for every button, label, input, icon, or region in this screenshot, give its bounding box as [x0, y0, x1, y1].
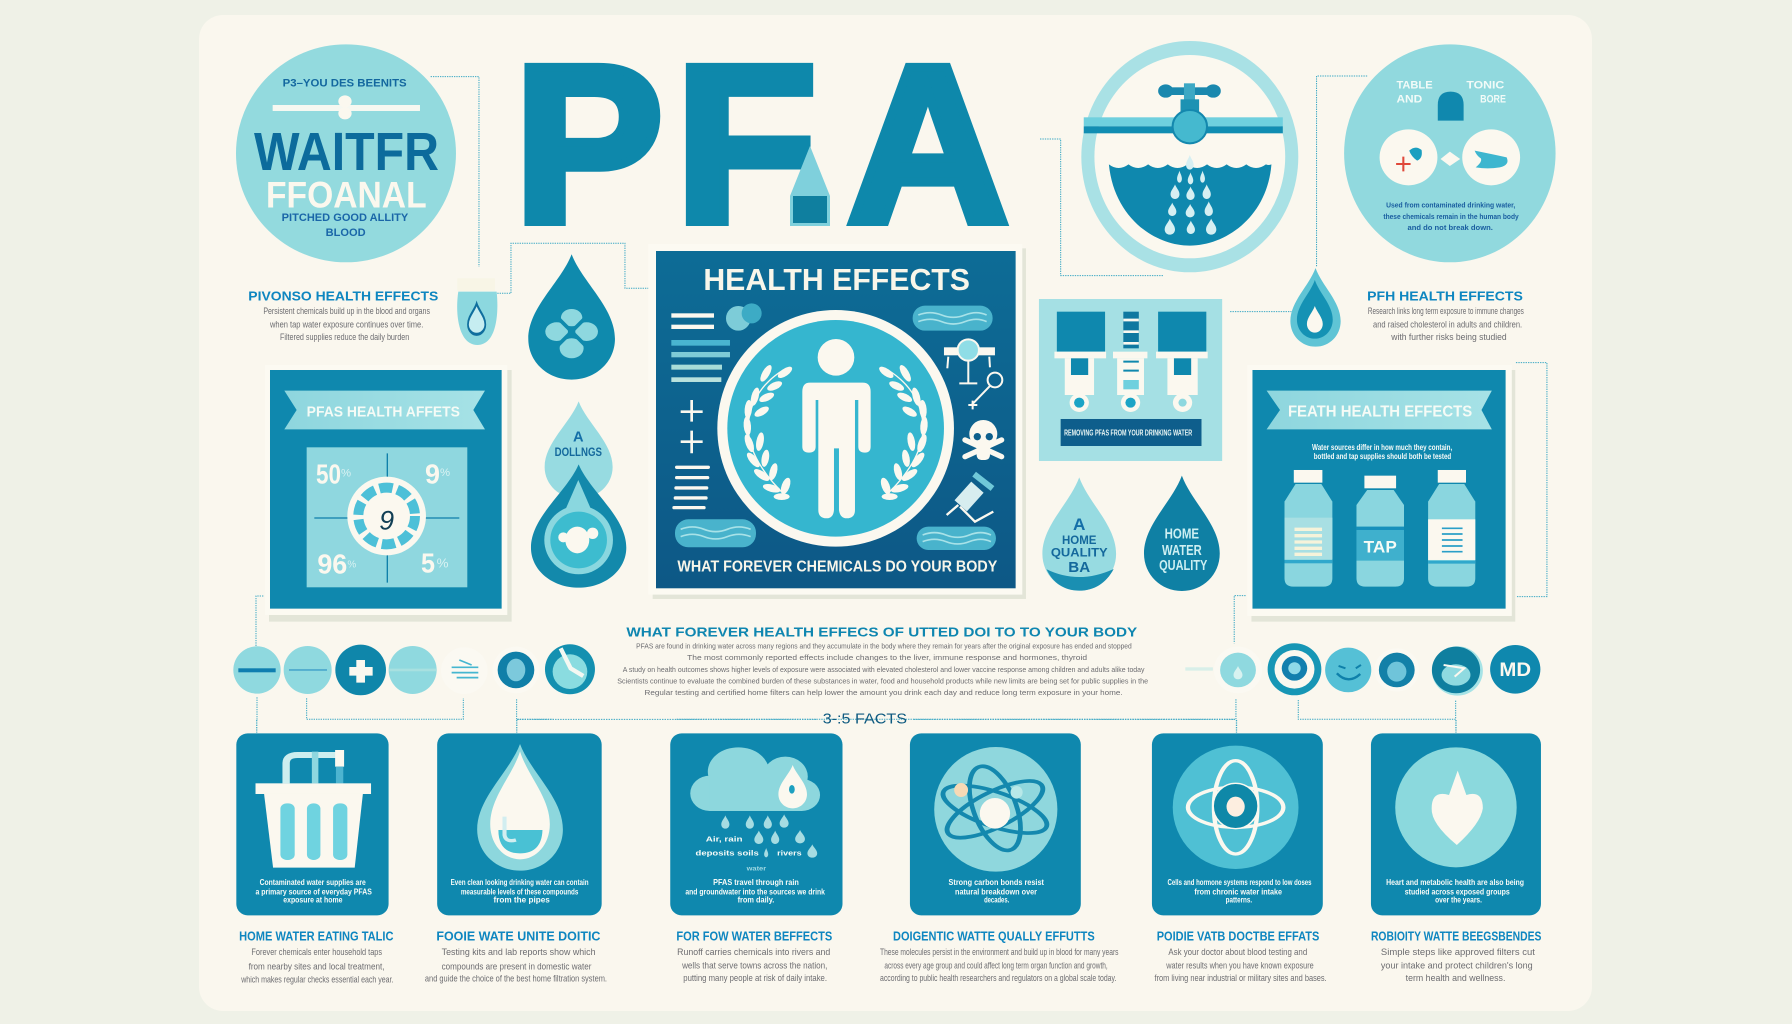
fact card 4: atom: natural breakdown over — [955, 887, 1037, 896]
icon: small title drop — [790, 146, 830, 226]
fact card 6: heart: studied across exposed groups — [1405, 887, 1510, 896]
fact card 4: atom — [910, 733, 1081, 915]
chart: quadrant dial: 9 — [425, 458, 440, 489]
panel: left dial — [265, 365, 512, 622]
icon: skull and crossbones — [965, 420, 1002, 460]
text block: left health effects: when tap water exposure continues over time. — [269, 319, 423, 329]
drop: home water quality light: BA — [1068, 560, 1090, 576]
chart: quadrant dial: 5 — [421, 548, 435, 579]
caption card 6 — [1371, 930, 1542, 984]
icon: right small drop — [1290, 268, 1341, 347]
fact card 5: cell: Cells and hormone systems respond to low doses — [1168, 878, 1312, 887]
chart: quadrant dial: % — [341, 468, 351, 480]
main card — [199, 15, 1592, 1011]
intro text: bottled and tap supplies should both be tested — [1314, 452, 1451, 461]
icon: cell rings — [1173, 746, 1299, 869]
caption card 5: POIDIE VATB DOCTBE EFFATS — [1157, 930, 1319, 944]
caption card 6: term health and wellness. — [1406, 974, 1505, 984]
fact card 1: basket faucet: Contaminated water supplies are — [260, 878, 366, 887]
caption card 2: compounds are present in domestic water — [442, 962, 592, 972]
drop: home water quality dark: HOME — [1165, 527, 1199, 542]
drop: water lens dark — [531, 464, 626, 588]
fact card 3: rain cloud: and groundwater into the sources we drink — [685, 887, 825, 896]
ribbon heading: PFAS HEALTH AFFETS — [307, 405, 460, 421]
badge: water circle: WAITFR — [254, 123, 439, 182]
text block: center body description: PFAS are found in drinking water across many regions and they accumulate in the body where they remain for years after the original exposure has ended and stopped — [636, 642, 1132, 650]
text block: center body description — [617, 624, 1149, 697]
panel: central health effects — [648, 244, 1026, 599]
icon: right laurel — [877, 363, 929, 500]
icon: water drop with pipe — [477, 744, 563, 871]
text block: center body description: The most commonly reported effects include changes to the liver, immune response and hormones, thyroid — [687, 653, 1087, 662]
caption card 3: putting many people at risk of daily intake. — [683, 974, 827, 984]
fact card 4: atom: decades. — [984, 896, 1009, 904]
badge: right circle: BORE — [1480, 94, 1506, 106]
fact card 3: rain cloud: PFAS travel through rain — [713, 878, 799, 887]
connector ticks right cards — [1237, 720, 1456, 733]
fact card 2: drop — [437, 733, 602, 915]
ribbon heading — [1267, 391, 1492, 429]
badge: right circle: and do not break down. — [1407, 223, 1493, 232]
connector lines top left — [431, 77, 648, 293]
text block: left health effects: Filtered supplies reduce the daily burden — [280, 332, 409, 342]
caption card 3: wells that serve towns across the nation, — [681, 961, 827, 971]
icon: cloud and rain: deposits soils — [696, 849, 759, 857]
text block: left health effects: PIVONSO HEALTH EFFECTS — [248, 290, 438, 304]
drop: home water quality dark — [1144, 476, 1220, 591]
text block: right health effects: and raised cholesterol in adults and children. — [1373, 320, 1522, 330]
icon: syringe — [947, 472, 994, 522]
fact card 2: drop: Even clean looking drinking water can contain — [451, 878, 589, 887]
drop: home water quality light: A — [1073, 515, 1085, 534]
caption card 2: FOOIE WATE UNITE DOITIC — [436, 930, 600, 944]
fact card 2: drop: measurable levels of these compounds — [461, 887, 578, 896]
bottle 2: tap: TAP — [1364, 538, 1397, 557]
drop: home water quality light: QUALITY — [1051, 546, 1108, 560]
drop: dollars light: A — [573, 430, 584, 446]
caption card 6: your intake and protect children's long — [1381, 961, 1533, 971]
text block: left health effects: Persistent chemicals build up in the blood and organs — [263, 306, 430, 316]
caption card 1 — [239, 930, 393, 985]
caption card 5 — [1155, 930, 1327, 984]
heading: health effects: HEALTH EFFECTS — [703, 263, 970, 297]
fact card 6: heart: over the years. — [1435, 896, 1482, 904]
badge: person in laurel circle — [717, 310, 954, 547]
fact card 1: basket faucet — [236, 733, 389, 915]
fact card 6: heart: Heart and metabolic health are also being — [1386, 878, 1524, 887]
badge: right circle: these chemicals remain in the human body — [1383, 212, 1519, 221]
title: PFA: A — [847, 20, 1009, 270]
bottle 3 — [1428, 470, 1475, 587]
connector ticks left cards — [257, 720, 517, 733]
badge: right circle: TABLE — [1396, 79, 1433, 91]
caption card 3 — [676, 930, 832, 984]
chart: quadrant dial: 9 — [379, 505, 394, 535]
chart: quadrant dial: 50 — [316, 458, 341, 489]
icon: left laurel — [743, 363, 794, 500]
text block: center body description: WHAT FOREVER HEALTH EFFECS OF UTTED DOI TO TO YOUR BODY — [626, 624, 1138, 640]
caption card 5: Ask your doctor about blood testing and — [1168, 948, 1307, 958]
badge: water circle: BLOOD — [326, 227, 366, 239]
chart: quadrant dial — [307, 447, 467, 587]
title: PFA — [514, 20, 1009, 270]
icon: heart in circle — [1395, 747, 1517, 867]
connector lines left row — [256, 596, 553, 720]
badge: right circle: AND — [1396, 94, 1422, 106]
chart: quadrant dial: % — [440, 467, 450, 479]
water bowl — [1109, 164, 1271, 246]
icon: atom — [934, 747, 1057, 872]
faucet — [1158, 83, 1221, 143]
text block: right health effects — [1367, 289, 1524, 342]
chart: quadrant dial: % — [437, 555, 449, 570]
badge: water circle — [236, 44, 456, 262]
badge: right circle: Used from contaminated drinking water, — [1386, 201, 1515, 210]
caption card 5: water results when you have known exposure — [1166, 961, 1314, 971]
panel: filter cartridges: REMOVING PFAS FROM YOUR DRINKING WATER — [1064, 428, 1192, 437]
fact card 6: heart — [1371, 733, 1541, 915]
caption card 1: from nearby sites and local treatment, — [249, 962, 385, 972]
bottle 2: tap — [1356, 476, 1404, 587]
caption card 3: FOR FOW WATER BEFFECTS — [676, 930, 832, 944]
caption card 4 — [880, 930, 1119, 984]
icon: key — [968, 373, 1002, 409]
fact card 2: drop: from the pipes — [493, 895, 550, 904]
fact card 1: basket faucet: a primary source of everyday PFAS — [256, 887, 372, 896]
icon row: right circles: MD — [1499, 659, 1531, 681]
bottle 1 — [1284, 470, 1332, 587]
icon: cloud and rain: water — [746, 864, 766, 872]
title: PFA: F — [675, 20, 817, 270]
heading: 3-5 facts with rules: 3-:5 FACTS — [823, 711, 907, 727]
chart: quadrant dial: % — [347, 559, 356, 570]
caption card 3: Runoff carries chemicals into rivers and — [677, 948, 830, 958]
fact card 5: cell — [1152, 733, 1323, 915]
icon: cloud and rain — [690, 747, 820, 872]
connector lines top right — [1040, 76, 1367, 312]
caption card 2 — [425, 930, 607, 984]
text block: left health effects — [248, 290, 438, 342]
fact card 4: atom: Strong carbon bonds resist — [949, 878, 1044, 887]
connector lines right panel — [676, 363, 1547, 719]
icon: wave blobs — [675, 306, 996, 550]
text block: right health effects: PFH HEALTH EFFECTS — [1367, 289, 1523, 304]
text block: right health effects: Research links long term exposure to immune changes — [1368, 306, 1524, 316]
pipe — [1084, 117, 1283, 133]
fact card 3: rain cloud — [670, 733, 843, 915]
text block: right health effects: with further risks being studied — [1390, 332, 1507, 342]
panel: filter cartridges — [1039, 299, 1222, 461]
badge: water circle: PITCHED GOOD ALLITY — [282, 212, 409, 224]
fact card 5: cell: patterns. — [1226, 896, 1252, 904]
filter label — [1061, 419, 1201, 446]
drop: dollars light: DOLLNGS — [555, 445, 602, 459]
panel: right bottles — [1247, 365, 1515, 622]
title: PFA: P — [514, 20, 663, 270]
drop: home water quality dark: QUALITY — [1159, 558, 1207, 574]
caption card 4: according to public health researchers and regulators on a global scale today. — [880, 974, 1116, 984]
filter units — [1054, 312, 1208, 412]
icon: microscope — [944, 339, 995, 383]
caption card 4: These molecules persist in the environment and build up in blood for many years — [880, 948, 1119, 958]
caption card 1: which makes regular checks essential each year. — [241, 975, 393, 985]
chart: quadrant dial: 96 — [317, 548, 347, 579]
ribbon heading — [284, 391, 485, 429]
fact card 1: basket faucet: exposure at home — [283, 895, 342, 904]
caption card 4: across every age group and could affect long term organ function and growth, — [884, 961, 1108, 971]
text block: center body description: Scientists continue to evaluate the combined burden of these substances in water, food and household products while new limits are being set for public supplies in the — [617, 677, 1149, 685]
caption card 4: DOIGENTIC WATTE QUALLY EFFUTTS — [893, 930, 1095, 944]
icon row: left circles — [233, 644, 595, 695]
caption card 6: Simple steps like approved filters cut — [1381, 948, 1535, 958]
drop: home water quality dark: WATER — [1162, 543, 1202, 559]
icon: faucet basket — [256, 750, 371, 868]
fact card 5: cell: from chronic water intake — [1194, 887, 1282, 896]
icon: left list bars — [671, 303, 762, 508]
text block: center body description: Regular testing and certified home filters can help lower the amount you drink each day and reduce long term exposure in your home. — [645, 688, 1123, 697]
badge: right circle — [1344, 44, 1556, 262]
badge: right circle: TONIC — [1466, 79, 1504, 91]
icon: drop with clover — [528, 254, 615, 380]
caption card 6: ROBIOITY WATTE BEEGSBENDES — [1371, 930, 1542, 944]
drop: dollars light — [545, 401, 613, 499]
fact card 3: rain cloud: from daily. — [738, 895, 774, 904]
ribbon heading: FEATH HEALTH EFFECTS — [1288, 404, 1472, 421]
caption card 5: from living near industrial or military sites and bases. — [1155, 974, 1327, 984]
intro text: Water sources differ in how much they contain, — [1312, 443, 1452, 452]
badge: water circle: P3–YOU DES BEENITS — [283, 78, 407, 90]
icon row: right circles — [1185, 643, 1540, 696]
caption card 2: Testing kits and lab reports show which — [442, 948, 596, 958]
icon: faucet circle — [1081, 41, 1298, 272]
caption card 1: Forever chemicals enter household taps — [251, 948, 382, 958]
drop: home water quality light: HOME — [1062, 533, 1096, 547]
badge: water circle: FFOANAL — [266, 174, 427, 215]
icon: cloud and rain: Air, rain — [706, 835, 742, 843]
caption card 2: and guide the choice of the best home filtration system. — [425, 974, 607, 984]
caption card 1: HOME WATER EATING TALIC — [239, 930, 393, 944]
icon: cloud and rain: rivers — [777, 849, 802, 857]
caption: what forever chemicals do: WHAT FOREVER CHEMICALS DO YOUR BODY — [677, 559, 997, 576]
icon: small cup with drop — [457, 278, 497, 345]
text block: center body description: A study on health outcomes shows higher levels of exposure were associated with elevated cholesterol and lower vaccine response among children and adults alike today — [623, 665, 1144, 674]
falling drops — [1165, 155, 1216, 235]
intro text — [1312, 443, 1452, 461]
drop: home water quality light — [1042, 477, 1116, 591]
